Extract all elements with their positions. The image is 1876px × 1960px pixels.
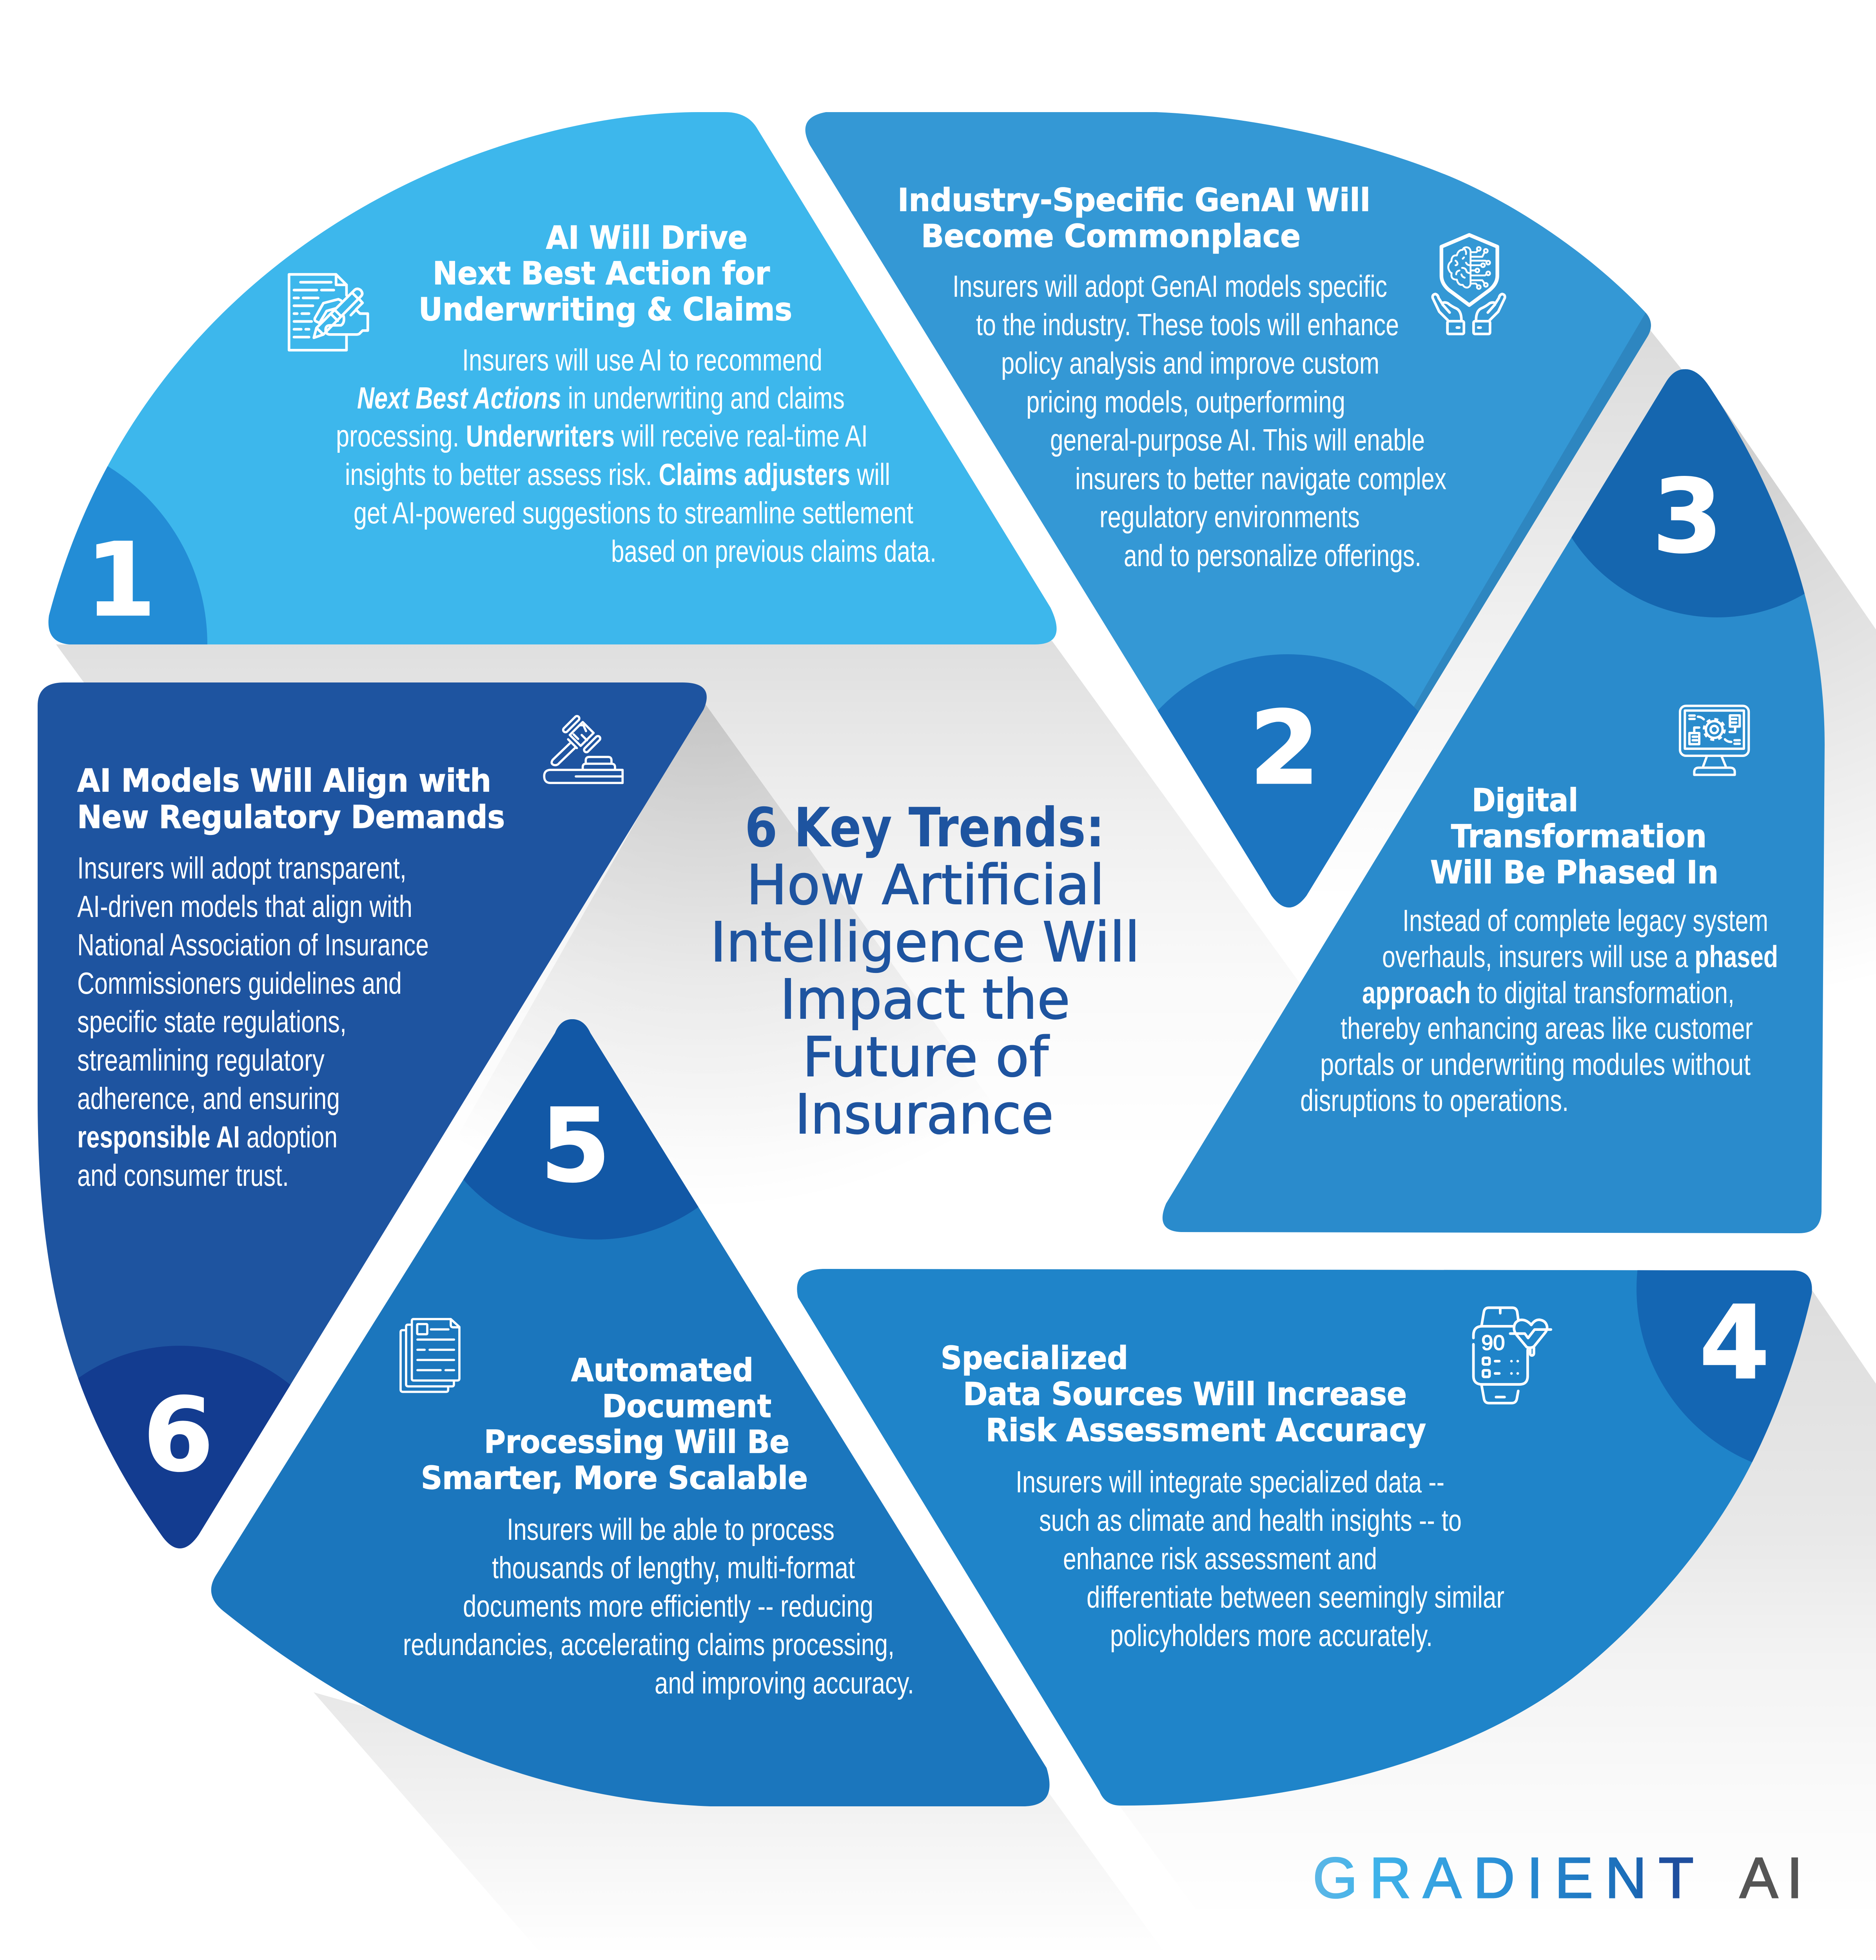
panel 4: specialized data sources (797, 1101, 1876, 1806)
heading 2 (898, 182, 1370, 254)
panel 3: digital transformation (1163, 272, 1876, 1233)
body text 2: to the industry. These tools will enhance (976, 307, 1399, 342)
icon: smartwatch with heart (1473, 1308, 1551, 1403)
body text 3: approach to digital transformation, (1362, 975, 1734, 1010)
heading 1 (419, 220, 792, 328)
body text 3: thereby enhancing areas like customer (1341, 1011, 1753, 1045)
panel 1: next best action (49, 112, 1057, 644)
panel 2 edge band (1411, 312, 1662, 711)
title: How Artificial (746, 853, 1105, 917)
panel 4 shape (797, 1269, 1812, 1806)
body text 6: responsible AI adoption (77, 1120, 337, 1154)
body text 2: general-purpose AI. This will enable (1050, 423, 1425, 457)
heading 4: Risk Assessment Accuracy (986, 1412, 1426, 1448)
body text 4: differentiate between seemingly similar (1087, 1580, 1504, 1614)
title: Future of (802, 1025, 1050, 1089)
body text 6: AI-driven models that align with (77, 889, 412, 924)
number badge 3 (1544, 272, 1876, 617)
body text 3: portals or underwriting modules without (1320, 1047, 1751, 1082)
number badge 6 (4, 1346, 356, 1697)
body text 2: insurers to better navigate complex (1075, 461, 1446, 496)
number badge 4 (1637, 1101, 1876, 1477)
body text 6: and consumer trust. (77, 1158, 289, 1192)
heading 6 (77, 762, 505, 835)
logo: gradient ai: GRADIENT (1313, 1846, 1694, 1910)
title (710, 796, 1140, 1147)
body text 3 (1300, 903, 1778, 1118)
panel 1 shape (49, 112, 1057, 644)
number badge 2 (1158, 654, 1419, 907)
heading 2: Industry-Specific GenAI Will (898, 182, 1370, 218)
body text 1 (336, 343, 936, 568)
number 3: 3 (1652, 458, 1723, 575)
heading 5: Processing Will Be (484, 1424, 789, 1460)
number badge 1 (49, 466, 207, 644)
icon: shield with brain and hands (1433, 235, 1505, 334)
number 1: 1 (85, 521, 156, 639)
body text 4 (1016, 1465, 1504, 1653)
title: 6 Key Trends: (745, 796, 1105, 859)
body text 6: Commissioners guidelines and (77, 966, 402, 1000)
title: Intelligence Will (710, 911, 1140, 975)
body text 2: regulatory environments (1099, 499, 1360, 534)
panel 2 shape (806, 112, 1651, 907)
title: Impact the (780, 968, 1070, 1032)
body text 6: specific state regulations, (77, 1004, 347, 1039)
body text 4: policyholders more accurately. (1110, 1618, 1433, 1653)
title: Insurance (795, 1083, 1054, 1147)
icon: smartwatch with heart: 90 (1481, 1331, 1505, 1354)
body text 1: processing. Underwriters will receive real-time AI (336, 419, 868, 453)
heading 6: AI Models Will Align with (77, 762, 491, 799)
body text 5: Insurers will be able to process (507, 1512, 835, 1546)
heading 1: AI Will Drive (546, 220, 747, 256)
heading 4: Specialized (941, 1340, 1128, 1376)
body text 2: policy analysis and improve custom (1001, 346, 1379, 380)
heading 5 (421, 1352, 808, 1496)
body text 6: streamlining regulatory (77, 1043, 325, 1077)
heading 6: New Regulatory Demands (77, 799, 505, 835)
icon: monitor with gear (1680, 706, 1749, 775)
icon: document and writing hand (289, 274, 368, 350)
body text 1: insights to better assess risk. Claims adjusters will (345, 457, 890, 492)
body text 6: Insurers will adopt transparent, (77, 851, 406, 885)
number 6: 6 (143, 1376, 214, 1494)
heading 5: Document (602, 1388, 771, 1425)
heading 3 (1430, 782, 1718, 891)
body text 1: based on previous claims data. (611, 534, 936, 568)
heading 5: Smarter, More Scalable (421, 1460, 808, 1496)
heading 2: Become Commonplace (921, 218, 1301, 254)
panel 3 shape (1163, 369, 1825, 1233)
panel 6: regulatory demands (4, 682, 707, 1697)
number 5: 5 (540, 1087, 611, 1205)
body text 2 (953, 269, 1446, 573)
body text 3: Instead of complete legacy system (1402, 903, 1768, 938)
heading 3: Transformation (1451, 818, 1707, 855)
icon: stacked documents (401, 1319, 459, 1392)
heading 3: Digital (1472, 782, 1578, 818)
heading 1: Underwriting & Claims (419, 291, 792, 328)
body text 2: and to personalize offerings. (1124, 538, 1421, 573)
body text 1: Insurers will use AI to recommend (462, 343, 822, 377)
body text 6 (77, 851, 429, 1192)
body text 5: documents more efficiently -- reducing (463, 1589, 873, 1623)
heading 4 (941, 1340, 1426, 1448)
panel 6 shape (38, 682, 707, 1548)
body text 3: overhauls, insurers will use a phased (1382, 939, 1778, 974)
body text 6: National Association of Insurance (77, 927, 429, 962)
body text 4: enhance risk assessment and (1063, 1541, 1377, 1576)
panel 5 shape (211, 1019, 1050, 1806)
body text 3: disruptions to operations. (1300, 1083, 1569, 1118)
body text 6: adherence, and ensuring (77, 1081, 340, 1116)
icon: gavel on book (544, 715, 622, 783)
body text 5 (403, 1512, 914, 1700)
heading 1: Next Best Action for (433, 255, 770, 292)
number 2: 2 (1249, 690, 1320, 807)
heading 4: Data Sources Will Increase (963, 1376, 1407, 1412)
body text 1: get AI-powered suggestions to streamline settlement (354, 495, 913, 530)
body text 5: and improving accuracy. (655, 1666, 914, 1700)
heading 5: Automated (571, 1352, 753, 1388)
body text 5: redundancies, accelerating claims processing, (403, 1627, 894, 1662)
panel 2: industry-specific genai (805, 112, 1651, 907)
body text 4: Insurers will integrate specialized data -- (1016, 1465, 1444, 1499)
panel 5: automated document processing (211, 885, 1050, 1806)
body text 5: thousands of lengthy, multi-format (492, 1550, 855, 1585)
heading 3: Will Be Phased In (1430, 854, 1718, 891)
logo: gradient ai: AI (1740, 1846, 1803, 1910)
body text 4: such as climate and health insights -- to (1039, 1503, 1462, 1537)
number badge 5 (419, 885, 773, 1240)
body text 1: Next Best Actions in underwriting and claims (357, 381, 845, 415)
number 4: 4 (1699, 1284, 1770, 1402)
body text 2: pricing models, outperforming (1026, 385, 1345, 419)
body text 2: Insurers will adopt GenAI models specific (953, 269, 1387, 303)
